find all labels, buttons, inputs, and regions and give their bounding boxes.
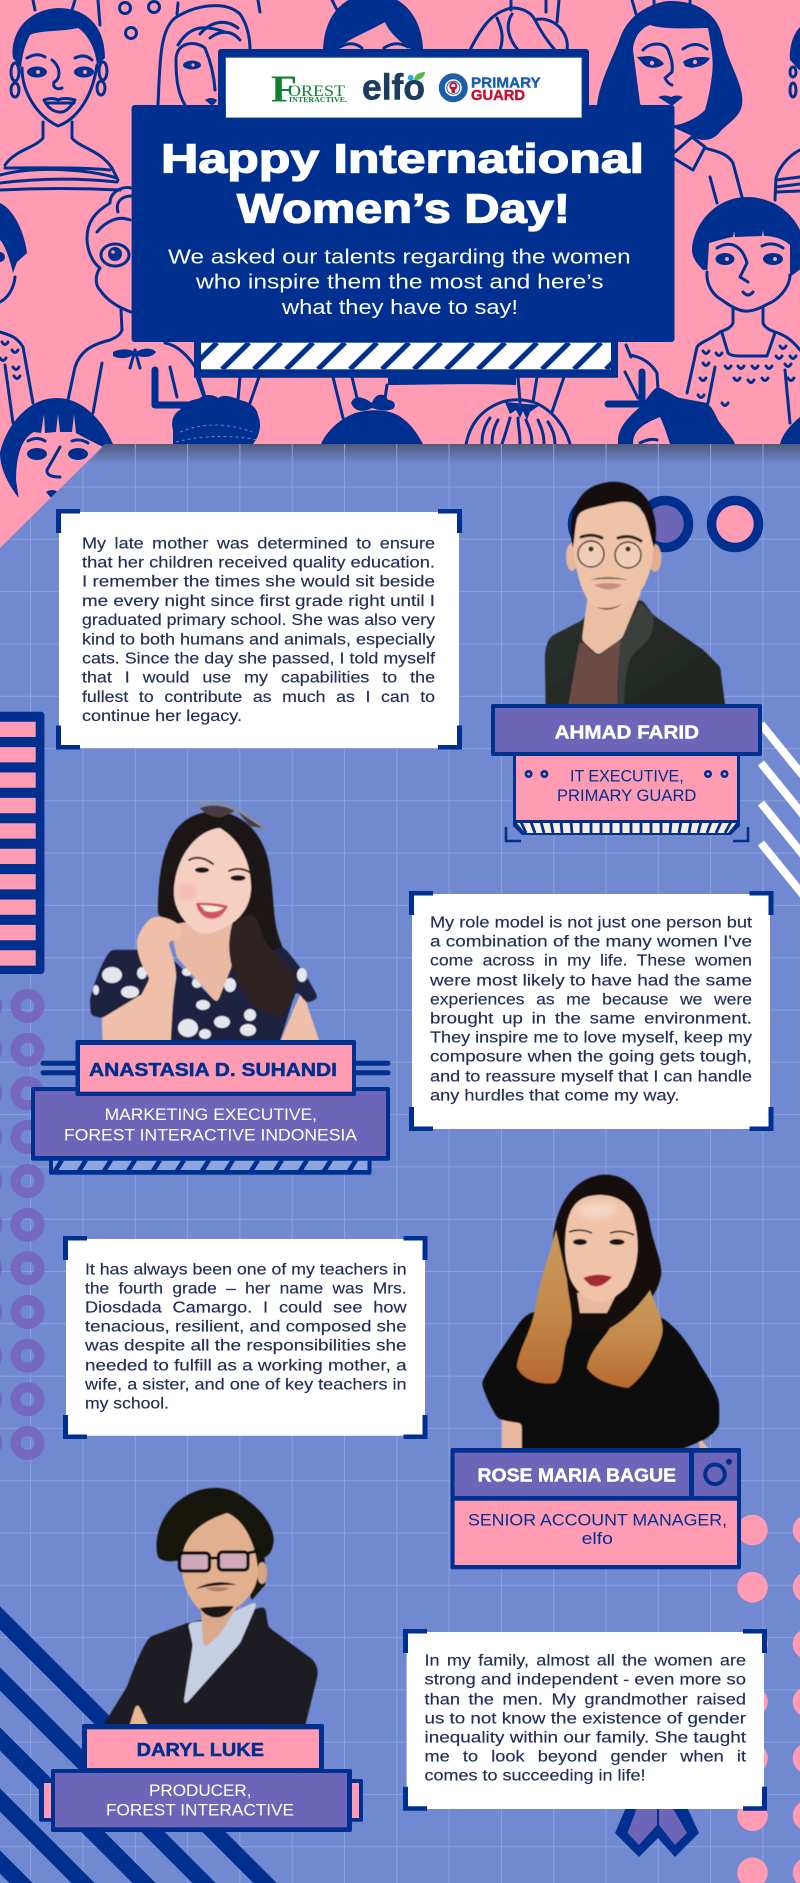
woman with bow — [321, 377, 423, 444]
portrait: Daryl Luke — [98, 1488, 318, 1734]
quote text 1: cats. Since the day she passed, I told myself — [82, 650, 436, 668]
quote text 3 — [84, 1261, 407, 1412]
decoration: white diagonal stripes — [761, 724, 800, 896]
woman top left — [0, 0, 120, 190]
quote text 3: It has always been one of my teachers in — [85, 1261, 407, 1278]
subtitle: who inspire them the most and here’s — [195, 270, 604, 293]
icon: ring and dot — [705, 1459, 732, 1484]
quote text 1: that I would use my capabilities to the — [82, 670, 435, 687]
section top shadow — [88, 444, 800, 464]
quote text 1: kind to both humans and animals, especially — [82, 631, 435, 648]
quote text 4: strong and independent - even more so — [424, 1672, 746, 1689]
name: DARYL LUKE — [137, 1739, 264, 1760]
name: ANASTASIA D. SUHANDI — [89, 1059, 337, 1080]
quote text 2: any hurdles that come my way. — [430, 1088, 680, 1105]
role — [64, 1106, 357, 1144]
title: Women’s Day! — [237, 186, 570, 232]
stripe band — [49, 1155, 372, 1175]
logo: Primary Guard: PRIMARY — [471, 74, 541, 91]
header panel — [132, 105, 675, 342]
woman left edge — [0, 203, 33, 423]
curly-haired woman — [68, 188, 205, 413]
quote text 2: experiences as me because we were — [430, 992, 752, 1009]
header pink background — [0, 0, 800, 560]
quote text 1: me every night since first grade right until I — [82, 593, 435, 610]
quote text 1: graduated primary school. She was also very — [82, 612, 435, 629]
role — [557, 768, 697, 805]
role: PRIMARY GUARD — [557, 787, 697, 805]
logo: elfo: elfo — [362, 66, 425, 108]
quote box 4 — [403, 1629, 767, 1811]
woman bottom right with cross — [608, 345, 800, 444]
quote text 4 — [424, 1652, 747, 1785]
quote text 4: us to not know the existence of gender — [424, 1710, 746, 1727]
subtitle: what they have to say! — [281, 296, 518, 319]
logo: Forest Interactive — [271, 68, 347, 110]
quote text 2: My role model is not just one person but — [430, 915, 753, 932]
quote text 2 — [429, 915, 753, 1105]
quote box 3 — [63, 1236, 428, 1439]
logo: Forest Interactive: OREST — [288, 83, 345, 100]
quote text 2: were most likely to have had the same — [429, 973, 752, 990]
side lines — [43, 1063, 388, 1073]
woman with curly crown — [172, 377, 260, 444]
role: IT EXECUTIVE, — [570, 768, 684, 786]
name plate: Rose Maria Bague — [450, 1448, 741, 1569]
quote text 3: Diosdada Camargo. I could see how — [85, 1299, 407, 1316]
role: MARKETING EXECUTIVE, — [105, 1106, 317, 1124]
side tabs — [39, 1779, 363, 1822]
decoration: pink dots at right — [737, 1515, 800, 1883]
plate dots — [525, 770, 728, 778]
quote text 3: was despite all the responsibilities she — [84, 1337, 407, 1354]
quote text 1: continue her legacy. — [82, 708, 242, 725]
quote text 4: comes to succeeding in life! — [424, 1768, 646, 1785]
title: Happy International — [161, 136, 644, 182]
quote text 4: me to look beyond gender when it — [424, 1749, 747, 1766]
quote box 1 — [56, 509, 462, 750]
quote text 3: wife, a sister, and one of key teachers in — [84, 1376, 407, 1393]
quote text 1: My late mother was determined to ensure — [82, 535, 435, 552]
quote text 3: tenacious, resilient, and composed she — [85, 1318, 407, 1335]
quote text 2: come across in my life. These women — [430, 953, 752, 970]
decoration: purple rings at left — [0, 994, 40, 1455]
portrait: Ahmad Farid — [545, 482, 726, 714]
woman right bob — [687, 197, 800, 423]
quote text 3: needed to fulfill as a working mother, a — [85, 1357, 407, 1374]
name: AHMAD FARID — [555, 721, 699, 742]
woman behind logo with glasses — [323, 0, 423, 52]
blue section background — [0, 444, 800, 1883]
header stripe band — [190, 340, 633, 385]
name plate: Anastasia D. Suhandi — [31, 1040, 390, 1175]
subtitle: We asked our talents regarding the women — [168, 245, 631, 268]
logo: Forest Interactive: F — [271, 68, 297, 110]
role — [468, 1511, 727, 1548]
stripe base — [513, 755, 740, 835]
quote text 3: my school. — [85, 1395, 169, 1412]
illustration: crowd of women — [0, 0, 800, 520]
role — [106, 1782, 294, 1819]
quote text 2: brought up in the same environment. — [430, 1011, 752, 1028]
quote text 4: inequality within our family. She taught — [424, 1729, 747, 1746]
quote text 2: a combination of the many women I've — [430, 934, 752, 951]
quote text 2: and to reassure myself that I can handle — [430, 1068, 752, 1085]
woman with hands over head — [470, 0, 567, 50]
name plate: Ahmad Farid — [491, 704, 762, 841]
decoration: navy diagonal stripes bottom left — [0, 1608, 290, 1883]
title — [161, 136, 644, 232]
portrait: Rose Maria Bague — [482, 1175, 719, 1458]
portrait: Anastasia D. Suhandi — [90, 802, 322, 1050]
quote box 2 — [409, 891, 774, 1131]
role: elfo — [582, 1530, 613, 1548]
quote text 3: the fourth grade – her name was Mrs. — [85, 1280, 407, 1297]
role: PRODUCER, — [149, 1782, 252, 1800]
name: ROSE MARIA BAGUE — [478, 1465, 676, 1486]
quote text 1 — [82, 535, 436, 725]
role: SENIOR ACCOUNT MANAGER, — [468, 1511, 727, 1529]
logo: Primary Guard: GUARD — [471, 87, 525, 104]
woman bottom left with fringe — [0, 398, 125, 520]
subtitle — [168, 245, 631, 319]
decoration: pink ladder at left — [0, 712, 44, 974]
quote text 1: fullest to contribute as much as I can to — [82, 689, 435, 706]
logo: Primary Guard — [442, 74, 541, 104]
decoration: three rings near Ahmad — [572, 500, 758, 548]
role: FOREST INTERACTIVE INDONESIA — [64, 1126, 357, 1144]
woman far right edge — [775, 27, 800, 200]
name plate: Daryl Luke — [39, 1724, 363, 1832]
woman top right — [597, 0, 742, 203]
quote text 1: I remember the times she would sit beside — [82, 574, 435, 591]
quote text 4: In my family, almost all the women are — [424, 1652, 746, 1669]
quote text 2: They inspire me to love myself, keep my — [430, 1030, 752, 1047]
logo: Forest Interactive: INTERACTIVE. — [289, 96, 347, 104]
blonde woman — [158, 0, 260, 105]
logo panel — [218, 49, 589, 119]
quote text 1: that her children received quality education. — [82, 554, 435, 572]
decorative rings — [120, 2, 160, 38]
quote text 4: than the men. My grandmother raised — [424, 1691, 746, 1708]
role: FOREST INTERACTIVE — [106, 1801, 294, 1819]
ribbon icon — [615, 1805, 699, 1857]
woman with hair strands — [466, 377, 570, 444]
quote text 2: composure when the going gets tough, — [430, 1049, 752, 1066]
